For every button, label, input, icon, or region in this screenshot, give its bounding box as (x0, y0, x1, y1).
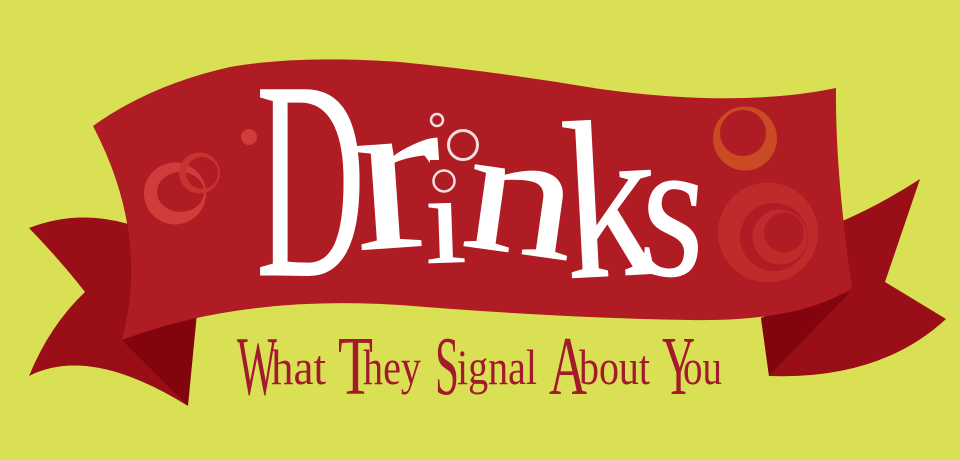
subtitle: W (237, 320, 277, 413)
title: Drinks: r (343, 44, 450, 299)
title: Drinks: D (256, 24, 365, 337)
subtitle: A (549, 320, 587, 413)
subtitle: ignal (457, 339, 537, 395)
title: Drinks: s (632, 94, 717, 321)
left ribbon tail (29, 217, 197, 406)
subtitle: hat (271, 339, 326, 395)
decorative circles left (144, 152, 220, 224)
subtitle: bout (579, 339, 650, 395)
right ribbon tail (761, 179, 946, 376)
left ribbon fold (122, 313, 197, 406)
decorative concentric circles (718, 182, 818, 282)
subtitle: S (435, 320, 459, 413)
title: Drinks: i (422, 148, 468, 291)
cover for the dot of the i (430, 160, 460, 202)
title: Drinks (256, 24, 717, 337)
decorative orange ring (713, 106, 777, 170)
title: Drinks: n (454, 88, 591, 299)
subtitle: T (338, 320, 373, 413)
bubbles (431, 114, 478, 192)
subtitle: ou (683, 339, 722, 395)
decorative dot (241, 129, 257, 145)
title: Drinks: k (557, 73, 664, 327)
subtitle: Y (662, 320, 695, 413)
main banner (93, 59, 852, 340)
right ribbon fold (761, 292, 850, 376)
subtitle: hey (363, 339, 421, 395)
